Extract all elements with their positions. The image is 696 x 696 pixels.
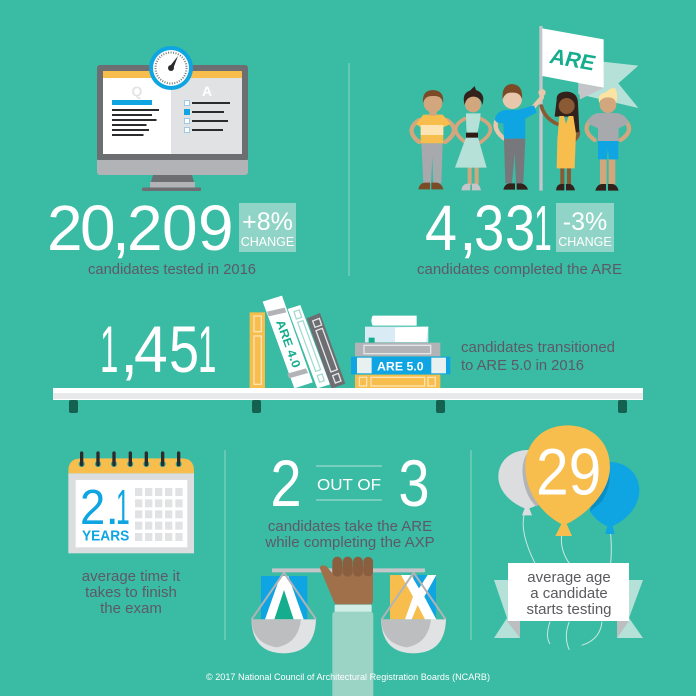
icon: ARE 4.0 book [263,296,313,388]
stat: 4,331: , [459,192,477,264]
person: grey shirt blue shorts [587,88,629,191]
illustration: shelf [53,388,643,413]
icon: sleeve [332,605,373,696]
icon: strings [523,515,611,650]
illustration: group of people with ARE flag [412,26,638,191]
illustration: balloons [498,425,639,650]
icon: computer monitor with exam: A [202,83,212,99]
stat: 2 out of 3: OUT OF [317,477,381,494]
stat: 4,331: 4 [425,192,457,264]
stat: 20,209: 20,209 [47,192,234,264]
stat: 1,451: 5 [169,312,199,386]
stat: 1,451: , [120,312,138,386]
panel: candidates completed [412,26,638,278]
icon: calendar: YEARS [82,529,129,545]
panel: transitioned to ARE 5.0 [53,296,643,413]
caption: candidates take the ARE: while completing the AXP [264,534,435,551]
stat: 4,331: 3 [474,192,504,264]
icon: yellow balloon: 29 [536,435,601,509]
icon: left pan [251,573,316,653]
stat: 1,451: 4 [134,314,168,387]
caption: average time: average time it [82,568,181,585]
badge: -3% change: CHANGE [558,235,612,249]
caption: transitioned: candidates transitioned [461,339,615,356]
stat: 1,451: 1 [198,314,216,387]
person: yellow shirt [412,90,454,189]
icon: grey balloon [498,450,548,515]
icon: stacked books [351,316,450,388]
caption: average time: the exam [100,600,162,617]
callout: average age banner [494,563,643,638]
panel: average age [494,425,643,650]
icon: mint striped book [288,305,330,388]
caption: transitioned [461,339,615,374]
icon: computer monitor with exam: Q [132,83,143,99]
stat: 2 out of 3: 3 [398,447,430,520]
callout: average age banner: a candidate [530,585,608,602]
stat: 1,451 [100,312,216,387]
badge: +8% change [239,203,296,252]
icon: AXP tile [390,575,436,619]
stat: 4,331: 3 [505,192,535,264]
icon: yellow book [250,312,265,388]
caption: candidates tested: candidates tested in 2016 [88,261,256,278]
caption: candidates take the ARE [264,518,435,551]
caption: candidates completed: candidates completed the ARE [417,261,622,278]
icon: ARE tile [261,576,307,619]
icon: ARE 4.0 book: ARE 4.0 [273,318,304,370]
badge: +8% change: +8% [242,208,293,236]
icon: calendar: . [105,480,119,535]
icon: hand [320,557,373,604]
icon: flag [539,26,638,191]
callout: average age banner: average age [527,569,611,586]
icon: calendar: 1 [116,481,130,535]
icon: yellow balloon [525,425,610,536]
stat: 2 out of 3 [270,447,430,520]
icon: calendar [68,453,194,553]
icon: right pan [381,573,446,653]
badge: -3% change: -3% [563,208,607,236]
icon: flag: ARE [547,45,599,75]
person: mint dress [455,86,490,190]
stat: 2 out of 3: 2 [270,447,302,520]
caption: average time: takes to finish [85,584,177,601]
icon: calendar: 2 [80,480,105,535]
icon: blue balloon [590,462,639,534]
stat: 1,451: 1 [100,314,118,387]
person: yellow dress [541,92,579,190]
copyright footer: © 2017 National Council of Architectural Registration Boards (NCARB) [206,672,490,683]
stat: 4,331: 1 [534,192,552,264]
panel: candidates tested [47,46,296,278]
panel: 2 out of 3 [251,447,446,696]
illustration: books [250,296,450,389]
illustration: balance scale with hand [251,557,446,696]
stat: 4,331 [425,192,552,264]
icon: computer monitor with exam [97,65,248,191]
person: blue shirt holding flag [495,84,546,190]
badge: -3% change [556,203,614,252]
icon: grey book [307,313,345,389]
icon: stacked books: ARE 5.0 [377,359,424,373]
callout: average age banner: starts testing [526,601,612,618]
caption: candidates take the ARE: candidates take the ARE [268,518,432,535]
badge: +8% change: CHANGE [241,235,294,249]
caption: average time [82,568,181,617]
caption: transitioned: to ARE 5.0 in 2016 [461,357,584,374]
panel: time to finish [68,453,194,617]
icon: stopwatch dial [149,46,193,90]
